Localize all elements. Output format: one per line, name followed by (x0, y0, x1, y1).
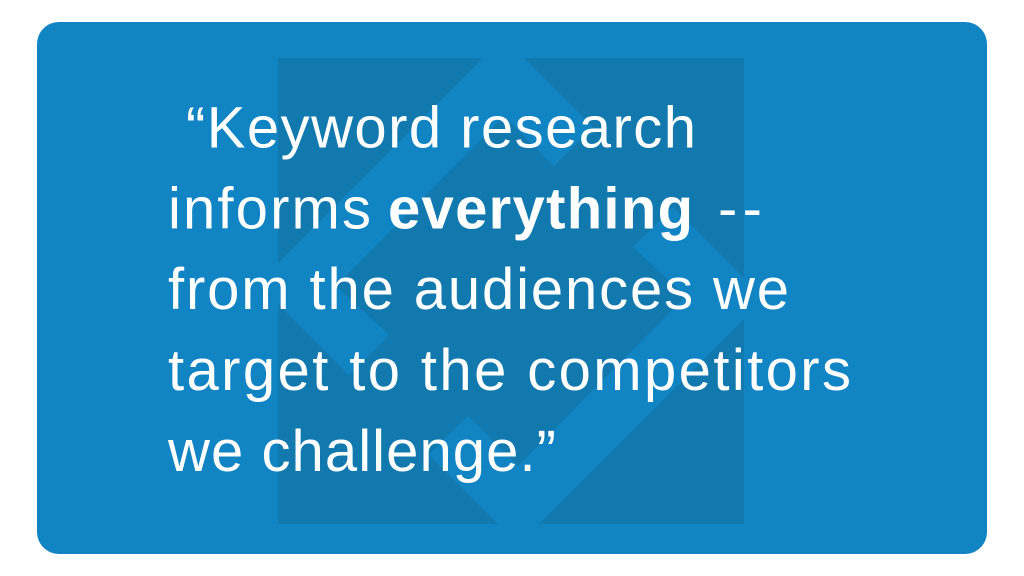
quote line 2 (168, 176, 762, 242)
quote line 2: informs (168, 176, 371, 242)
quote line 5: we challenge.” (167, 419, 556, 484)
icon: watermark diamond logo (278, 58, 744, 524)
quote line 4: target to the competitors (168, 338, 851, 403)
quote line 1: “Keyword research (186, 96, 696, 160)
quote line 2: everything (388, 176, 693, 242)
quote text (167, 96, 851, 484)
quote line 2: -- (718, 176, 762, 242)
quote line 3: from the audiences we (168, 257, 789, 322)
